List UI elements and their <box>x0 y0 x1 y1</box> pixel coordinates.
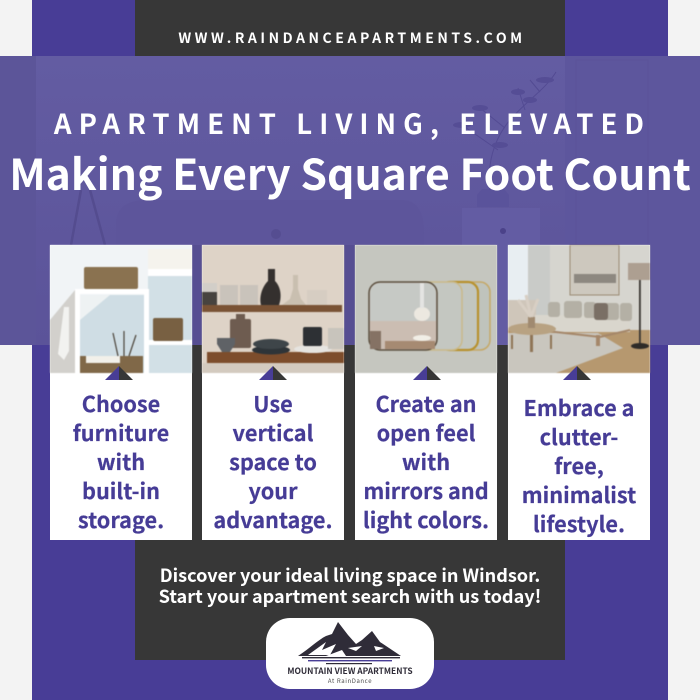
tip text <box>522 392 636 539</box>
icon: triangle marker <box>413 366 441 380</box>
call to action <box>159 562 541 609</box>
icon: triangle marker <box>105 366 133 380</box>
card: vertical space <box>202 245 344 540</box>
tip text: light colors. <box>363 504 489 535</box>
tip text: Choose <box>82 388 160 418</box>
icon: triangle marker <box>259 366 287 380</box>
tip text: open feel <box>377 417 475 448</box>
tip text: free, <box>554 450 604 481</box>
tip text <box>213 388 333 535</box>
tip text: with <box>97 446 145 477</box>
tip text: mirrors and <box>363 475 489 506</box>
tip text: Use <box>253 388 293 418</box>
tip text: with <box>402 446 450 477</box>
logo sub-name: At RainDance <box>328 676 372 685</box>
tip text: minimalist <box>522 479 636 510</box>
photo: mirrors <box>354 244 498 374</box>
tip text: clutter- <box>540 421 618 452</box>
dark column <box>135 0 565 660</box>
website url: WWW.RAINDANCEAPARTMENTS.COM <box>178 28 526 48</box>
card: mirrors <box>355 245 497 540</box>
photo: floating shelves <box>201 244 345 374</box>
tip text: Create an <box>375 388 477 418</box>
tip text: lifestyle. <box>533 508 625 539</box>
tip text: built-in <box>82 475 160 506</box>
subtitle: APARTMENT LIVING, ELEVATED <box>54 102 651 142</box>
tip text: your <box>248 475 298 506</box>
icon: triangle marker <box>563 366 591 380</box>
photo: storage shelves <box>49 244 193 374</box>
tip text: vertical <box>233 417 313 448</box>
tip text: advantage. <box>213 504 333 535</box>
logo badge <box>266 618 434 689</box>
tip text: furniture <box>73 417 169 448</box>
call to action: Discover your ideal living space in Windsor. <box>160 562 540 588</box>
photo: living room <box>507 244 651 374</box>
call to action: Start your apartment search with us today! <box>159 583 541 609</box>
card: minimalist <box>508 245 650 540</box>
title: Making Every Square Foot Count <box>9 141 691 203</box>
icon: mountains <box>298 622 401 664</box>
card: furniture with storage <box>50 245 192 540</box>
banner with faded room photo <box>0 56 700 345</box>
tip text <box>73 388 169 535</box>
tip text: storage. <box>78 504 164 535</box>
tip text: space to <box>229 446 317 477</box>
tip text <box>363 388 489 535</box>
tip text: Embrace a <box>524 392 634 422</box>
logo name: MOUNTAIN VIEW APARTMENTS <box>287 665 413 677</box>
